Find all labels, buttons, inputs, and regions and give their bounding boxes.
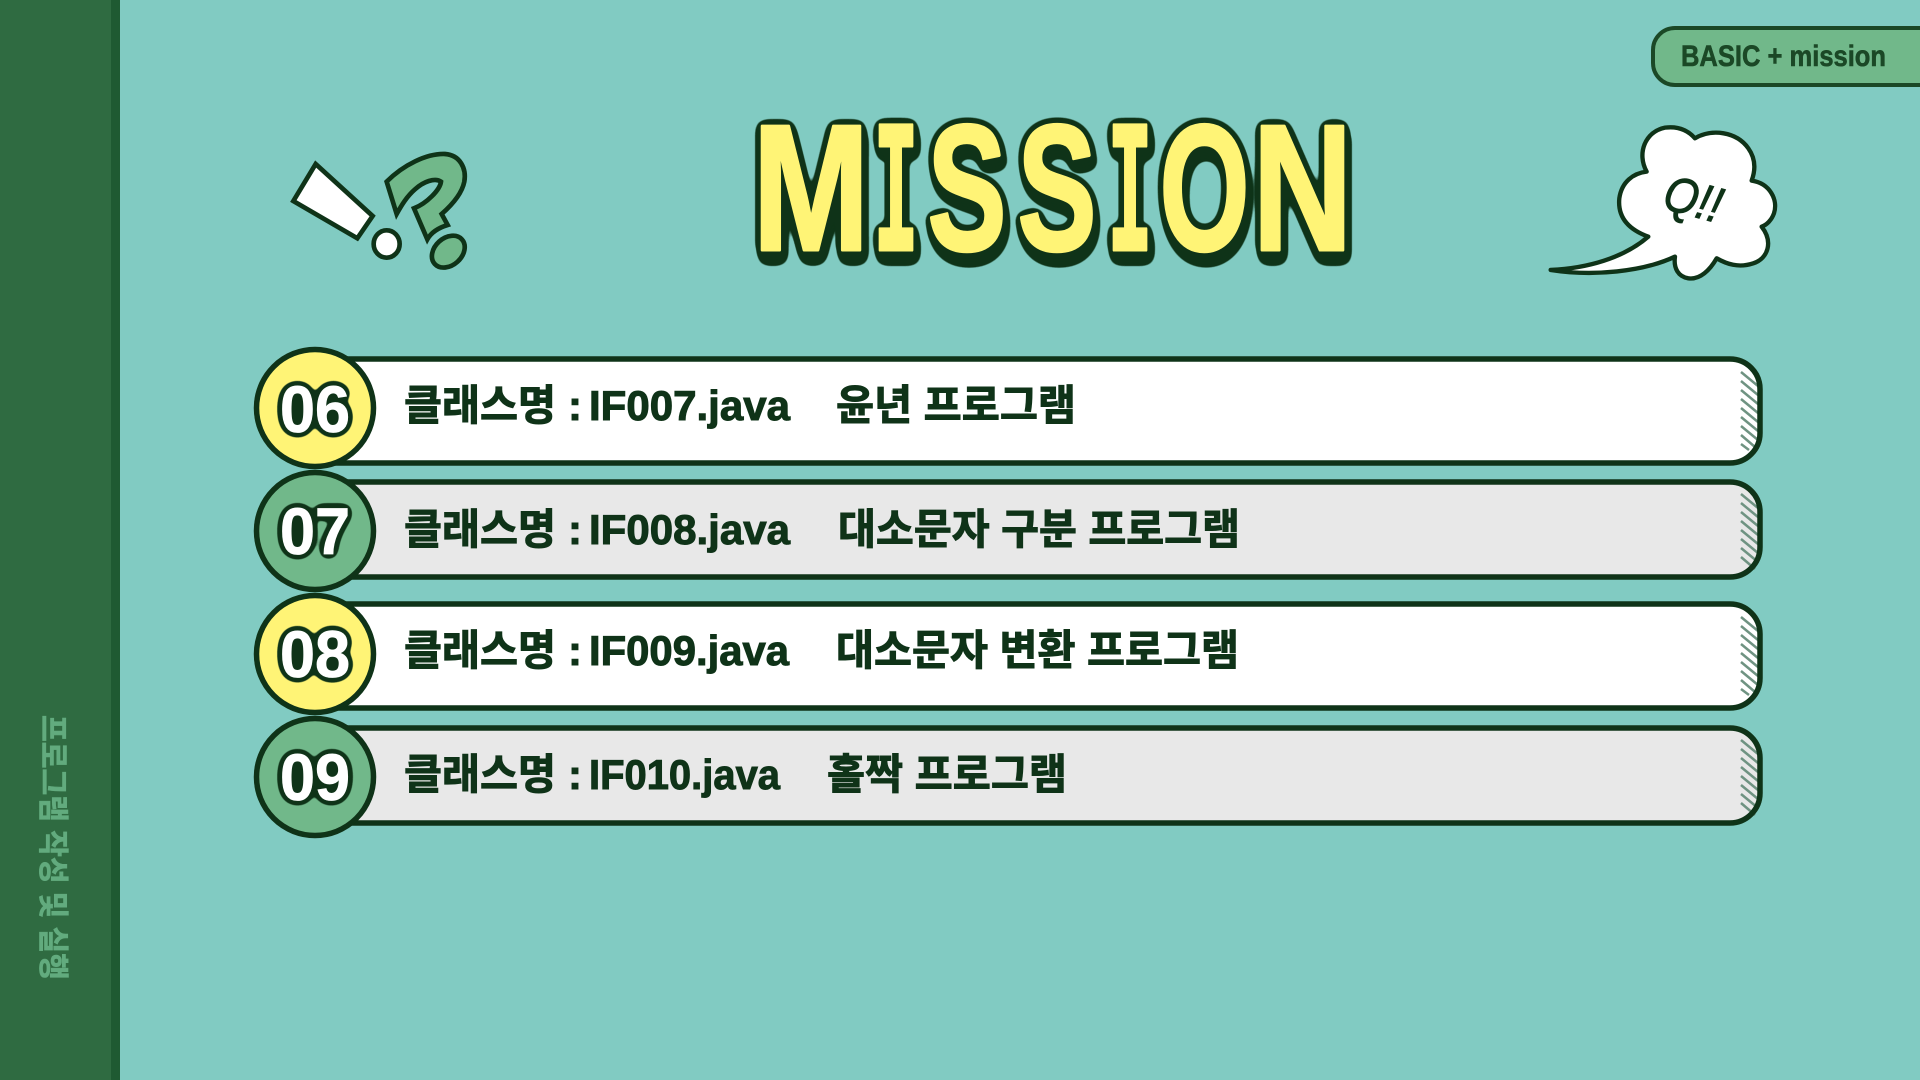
icon: exclamation and question marks xyxy=(293,154,471,274)
row text 07: 대소문자 구분 프로그램 xyxy=(838,506,1240,553)
row text 08: 대소문자 변환 프로그램 xyxy=(836,627,1239,674)
row text 09 xyxy=(404,751,1067,798)
row text 07: 클래스명 xyxy=(404,506,556,553)
row text 09: : xyxy=(568,751,582,798)
title: MISSION: M xyxy=(752,88,870,289)
number badge 09 xyxy=(256,718,374,836)
number badge 06: 06 xyxy=(280,372,350,446)
row bar 09 xyxy=(300,728,1760,823)
title: MISSION: I xyxy=(874,93,918,308)
list row 06 xyxy=(256,350,1760,466)
list row 07 xyxy=(256,472,1760,590)
number badge 09: 09 xyxy=(280,740,350,814)
row text 06: : xyxy=(568,382,582,429)
row bar 06 xyxy=(300,359,1760,463)
section tab: BASIC + mission xyxy=(1653,28,1920,85)
sidebar vertical label: 프로그램 작성 및 실행 xyxy=(35,715,70,980)
row bar 07 xyxy=(300,482,1760,577)
row text 07: IF008.java xyxy=(589,506,791,553)
icon: speech bubble Q!! xyxy=(1551,127,1775,278)
title: MISSION xyxy=(752,88,1352,308)
bubble text: Q!! xyxy=(1658,165,1729,234)
row text 08: : xyxy=(568,627,582,674)
panel: left sidebar xyxy=(0,0,120,1080)
row text 09: 홀짝 프로그램 xyxy=(827,751,1067,798)
number badge 06 xyxy=(256,350,374,466)
number badge 07: 07 xyxy=(280,494,350,568)
row text 06: IF007.java xyxy=(589,382,791,429)
row text 08: IF009.java xyxy=(589,627,790,674)
row text 09: 클래스명 xyxy=(404,751,556,798)
row text 07: : xyxy=(568,506,582,553)
row bar 08 xyxy=(300,604,1760,708)
row text 08: 클래스명 xyxy=(404,627,556,674)
row text 09: IF010.java xyxy=(589,751,781,798)
title: MISSION: I xyxy=(1108,93,1152,308)
title: MISSION: O xyxy=(1160,88,1250,289)
row text 06: 클래스명 xyxy=(404,382,556,429)
title: MISSION: N xyxy=(1252,88,1352,289)
row text 08 xyxy=(404,627,1239,674)
row text 06: 윤년 프로그램 xyxy=(836,382,1076,429)
list row 09 xyxy=(256,718,1760,836)
row text 06 xyxy=(404,382,1076,429)
row text 07 xyxy=(404,506,1240,553)
section tab: BASIC + mission: BASIC + mission xyxy=(1681,40,1886,73)
number badge 07 xyxy=(256,472,374,590)
number badge 08 xyxy=(256,596,374,712)
title: MISSION: S xyxy=(928,88,1006,289)
list row 08 xyxy=(256,596,1760,712)
title: MISSION: S xyxy=(1018,88,1096,289)
number badge 08: 08 xyxy=(280,617,350,691)
